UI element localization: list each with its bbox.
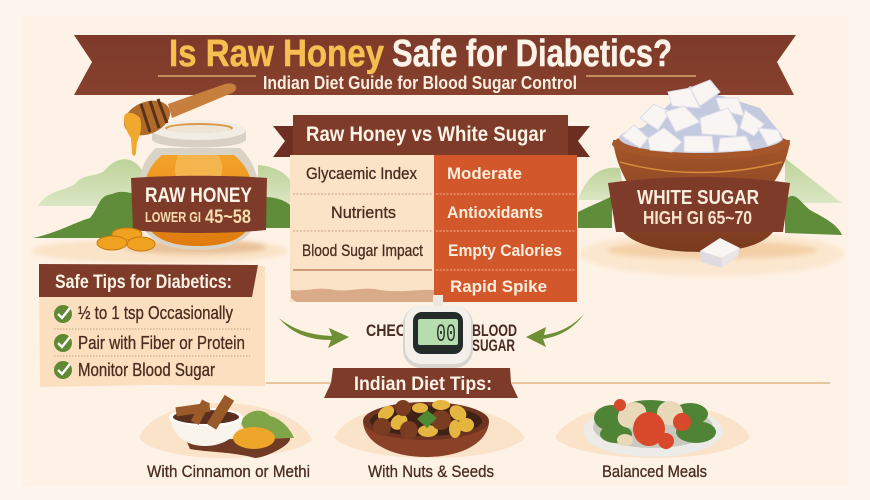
- illustration: sugar bowl: [608, 80, 790, 268]
- icon: jar lid: [152, 130, 246, 148]
- tips heading: Safe Tips for Diabetics:: [55, 272, 232, 293]
- food: cinnamon or methi: [139, 395, 312, 481]
- check blood sugar caption: CHEC: [366, 321, 406, 340]
- table left column: Nutrients: [331, 203, 396, 222]
- caption: With Cinnamon or Methi: [147, 463, 310, 481]
- panel: safe tips: [39, 264, 265, 387]
- icon: turmeric slices: [97, 228, 155, 251]
- tips heading: [39, 264, 258, 297]
- food: nuts and seeds: [334, 400, 525, 481]
- table left column: Blood Sugar Impact: [302, 241, 423, 260]
- tip 3: Monitor Blood Sugar: [78, 360, 215, 380]
- label: white sugar: WHITE SUGAR: [637, 187, 759, 209]
- check blood sugar caption: [366, 321, 517, 355]
- right background: bushes and ground: [578, 158, 844, 276]
- icon: sugar cubes: [619, 80, 783, 153]
- table right column: Moderate: [447, 164, 522, 183]
- left background: bushes and ground: [32, 159, 290, 263]
- arrow: left: [279, 318, 349, 348]
- icon: chickpeas: [233, 427, 275, 449]
- icon: glucose meter: 00: [436, 320, 456, 349]
- icon: wooden board: [186, 438, 290, 458]
- tip 2: Pair with Fiber or Protein: [78, 333, 245, 353]
- title: Is Raw Honey: [169, 33, 384, 75]
- check blood sugar caption: SUGAR: [472, 336, 515, 355]
- label: white sugar: [608, 177, 790, 232]
- icon: glucose meter: [403, 295, 473, 368]
- table right column: [434, 155, 577, 302]
- icon: cinnamon sticks: [175, 395, 234, 430]
- table left column: [290, 155, 434, 302]
- icon: white bowl: [170, 417, 243, 446]
- title banner: [74, 33, 796, 95]
- arrow: right: [526, 314, 584, 347]
- title banner: Safe for Diabetics?: [392, 33, 672, 75]
- table right column: Antioxidants: [447, 203, 543, 222]
- icon: bowl: [613, 140, 790, 252]
- icon: plate: [583, 405, 723, 457]
- label: raw honey: LOWER GI: [145, 209, 201, 226]
- comparison banner: Raw Honey vs White Sugar: [306, 123, 546, 146]
- subtitle: Indian Diet Guide for Blood Sugar Control: [263, 73, 577, 93]
- label: white sugar: HIGH GI 65~70: [643, 208, 752, 228]
- icon: sugar cube: [700, 238, 740, 268]
- illustration: honey jar with dipper: [97, 83, 267, 251]
- icon: nuts: [375, 400, 474, 438]
- food: balanced meals: [555, 397, 750, 481]
- tip 1: ½ to 1 tsp Occasionally: [78, 303, 233, 323]
- icon: tomatoes: [614, 399, 691, 449]
- indian diet tips banner: [324, 368, 518, 398]
- label: raw honey: 45~58: [205, 207, 251, 228]
- label: raw honey: RAW HONEY: [145, 184, 252, 207]
- table left column: Glycaemic Index: [306, 164, 417, 183]
- panel: comparison table: [273, 115, 590, 302]
- icon: jar body: [137, 148, 260, 250]
- icon: honey dipper: [168, 83, 236, 118]
- indian diet tips banner: Indian Diet Tips:: [354, 374, 492, 395]
- caption: Balanced Meals: [602, 463, 707, 481]
- table right column: Empty Calories: [448, 241, 562, 260]
- icon: potato pieces: [613, 397, 683, 446]
- comparison banner: [273, 115, 590, 157]
- icon: salad leaves: [594, 400, 716, 443]
- label: raw honey: [131, 176, 267, 233]
- check blood sugar caption: BLOOD: [472, 321, 517, 340]
- icon: clay bowl: [363, 422, 489, 457]
- table right column: Rapid Spike: [450, 277, 547, 296]
- icon: lettuce: [240, 411, 294, 438]
- caption: With Nuts & Seeds: [368, 463, 494, 481]
